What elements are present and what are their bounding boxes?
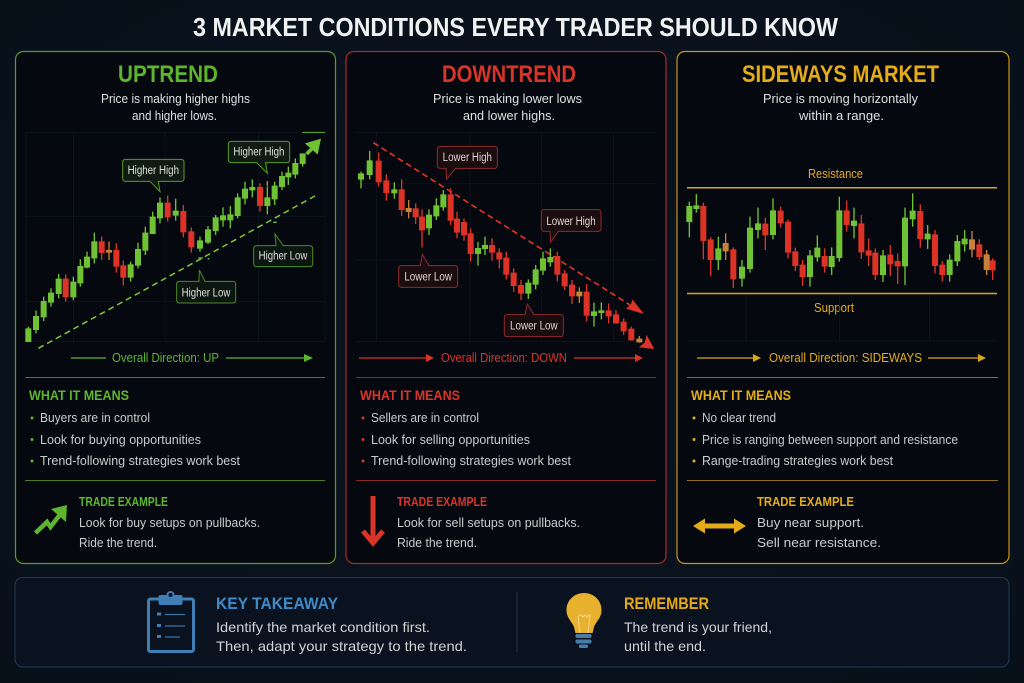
key takeaway text: KEY TAKEAWAY [216,595,338,613]
what it means: uptrend [29,388,240,468]
direction label: down: Overall Direction: DOWN [441,350,567,365]
heading: downtrend: DOWNTREND [442,61,576,88]
callout: higher low 1: Higher Low [182,285,231,299]
doji candles [107,181,267,260]
description: sideways: within a range. [798,108,884,123]
key takeaway text: Then, adapt your strategy to the trend. [216,638,467,654]
callout: higher high 2: Higher High [233,145,284,159]
callout: higher high 2 [228,141,290,173]
heading: uptrend: UPTREND [118,61,218,88]
swing low markers [198,222,277,259]
trade example: uptrend [79,495,260,550]
description: uptrend: and higher lows. [132,108,217,123]
divider: sideways [687,376,998,378]
divider: bottom panel [516,592,518,652]
panel frame: bottom summary [15,578,1009,667]
red candles [376,152,634,341]
trade example: sideways: Sell near resistance. [757,535,881,550]
divider: downtrend lower [356,480,656,482]
candlestick chart: uptrend [26,132,325,348]
arrowhead: chart end [639,335,654,349]
description: downtrend: and lower highs. [463,108,555,123]
description: downtrend [433,91,582,123]
divider: sideways lower [687,480,998,482]
direction arrow: uptrend [302,132,325,155]
resistance label and line: Resistance [808,167,863,181]
trade example: uptrend: Ride the trend. [79,535,157,550]
callout: higher low 2 [254,234,313,267]
what it means: sideways: WHAT IT MEANS [691,388,791,403]
what it means: uptrend: WHAT IT MEANS [29,388,129,403]
callout: lower high 2: Lower High [546,214,596,228]
direction label: down [359,350,643,365]
description: uptrend: Price is making higher highs [101,91,250,106]
remember text: REMEMBER [624,595,709,613]
heading: sideways market: SIDEWAYS MARKET [742,61,939,88]
green candles [687,193,967,287]
direction label: sideways [697,350,986,365]
callout: lower high 1: Lower High [443,150,492,164]
callout: higher low 1 [177,270,236,303]
green candles [26,153,305,342]
callout: higher high 1: Higher High [128,163,179,177]
divider: uptrend lower [25,480,325,482]
red candles [63,183,262,302]
arrowhead: trend line [626,299,644,314]
amber candles [723,231,989,275]
callout: higher high 1 [123,159,184,192]
panel: sideways [677,52,1009,564]
callout: lower low 2 [504,304,563,337]
candlestick chart: downtrend [356,133,655,349]
trade example: sideways [757,495,881,550]
amber candles [406,200,642,343]
direction label: up [71,350,313,365]
what it means: sideways [691,388,958,468]
remember text: until the end. [624,638,706,654]
panel: downtrend [346,52,666,564]
remember text: The trend is your friend, [624,619,772,635]
description: downtrend: Price is making lower lows [433,91,582,106]
trade example: downtrend [397,495,580,550]
red candles [701,201,995,288]
panel frame: downtrend [346,52,666,564]
divider: downtrend [356,376,656,378]
callout: lower high 1 [437,146,497,179]
what it means: downtrend: Trend-following strategies work best [371,453,571,468]
panel frame: sideways [677,52,1009,564]
icon: clipboard [148,592,194,652]
what it means: downtrend: Look for selling opportunities [371,432,530,447]
trade example: downtrend: Ride the trend. [397,535,477,550]
what it means: downtrend [360,388,571,468]
key takeaway text [216,595,467,654]
title: 3 MARKET CONDITIONS EVERY TRADER SHOULD KNOW [193,12,838,42]
what it means: uptrend: Look for buying opportunities [40,432,201,447]
icon: two-way arrow [693,518,746,534]
trade example: uptrend: Look for buy setups on pullbacks. [79,515,260,530]
trade example: sideways: TRADE EXAMPLE [757,495,854,509]
callout: lower low 1: Lower Low [404,270,452,284]
direction label: sideways: Overall Direction: SIDEWAYS [769,350,922,365]
what it means: uptrend: Trend-following strategies work best [40,453,240,468]
callout: lower low 2: Lower Low [510,319,558,333]
trend line: uptrend support [38,195,317,348]
description: sideways: Price is moving horizontally [763,91,918,106]
description: uptrend [101,91,250,123]
panel: uptrend [16,52,336,564]
trade example: sideways: Buy near support. [757,515,864,530]
callout: lower high 2 [541,210,601,242]
key takeaway text: Identify the market condition first. [216,619,430,635]
what it means: downtrend: WHAT IT MEANS [360,388,460,403]
callout: lower low 1 [399,254,458,287]
what it means: sideways: Price is ranging between support and resistance [702,432,958,447]
support label and line: Support [814,301,854,315]
divider: uptrend [25,376,325,378]
icon: down arrow [363,496,383,543]
callout: higher low 2: Higher Low [259,249,308,263]
green candles [359,151,604,327]
what it means: sideways: Range-trading strategies work best [702,453,893,468]
what it means: sideways: No clear trend [702,410,776,425]
remember text [624,595,772,654]
trade example: uptrend: TRADE EXAMPLE [79,495,168,509]
trend line: downtrend resistance [373,143,632,306]
what it means: uptrend: Buyers are in control [40,410,150,425]
panel: bottom summary [15,578,1009,667]
icon: rising arrow [36,505,67,533]
trade example: downtrend: Look for sell setups on pullbacks. [397,515,580,530]
icon: light bulb [566,593,602,648]
panel frame: uptrend [16,52,336,564]
candlestick chart: sideways [687,193,997,341]
direction label: up: Overall Direction: UP [112,350,219,365]
what it means: downtrend: Sellers are in control [371,410,479,425]
description: sideways [763,91,918,123]
trade example: downtrend: TRADE EXAMPLE [397,495,487,509]
